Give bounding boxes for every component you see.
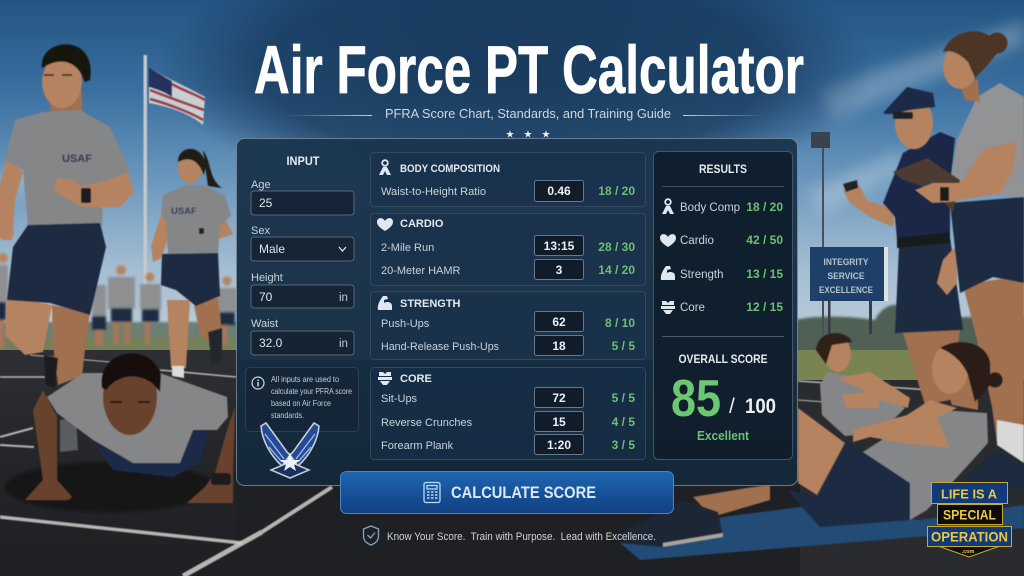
panel: results	[654, 152, 792, 460]
row: 20-meter hamr: 20-Meter HAMR	[381, 265, 461, 277]
runner: woman in USAF shirt	[151, 149, 233, 378]
height field: Height	[251, 272, 283, 284]
section: body composition	[370, 152, 646, 206]
runner: man in USAF shirt: USAF	[62, 153, 92, 165]
result: cardio: 42 / 50	[746, 233, 783, 247]
waist field: 32.0	[259, 336, 283, 350]
section heading: STRENGTH	[400, 298, 461, 310]
row: reverse crunches: Reverse Crunches	[381, 417, 473, 429]
row: push-ups: 62	[552, 315, 566, 329]
row: forearm plank: 3 / 5	[612, 438, 635, 452]
result: body comp: Body Comp	[680, 202, 740, 214]
height field: 70	[259, 290, 273, 304]
tagline: Know Your Score. Train with Purpose. Lead with Excellence.	[387, 531, 656, 543]
title backdrop vignette	[155, 0, 875, 200]
info note: calculate your PFRA score	[271, 386, 352, 396]
row: 2-mile run: 28 / 30	[598, 240, 635, 254]
button label: CALCULATE SCORE	[451, 483, 596, 502]
result: cardio: Cardio	[680, 235, 714, 247]
row: sit-ups: Sit-Ups	[381, 393, 418, 405]
waist field	[251, 318, 354, 355]
logo: life is a special operation: LIFE IS A	[941, 486, 998, 502]
section heading: CARDIO	[400, 218, 444, 230]
section heading: CORE	[400, 373, 432, 385]
section: cardio	[370, 214, 646, 286]
row: sit-ups: 72	[552, 391, 566, 405]
sign: integrity service excellence: SERVICE	[828, 271, 864, 282]
result: strength: Strength	[680, 269, 723, 281]
icon: person	[379, 160, 391, 175]
result: cardio	[660, 233, 783, 247]
situp partner man	[816, 333, 910, 436]
row: 2-mile run	[381, 236, 635, 256]
age field: 25	[259, 196, 273, 210]
runner: woman in USAF shirt: USAF	[171, 206, 197, 217]
sex field: Male	[259, 242, 285, 256]
result: core: Core	[680, 302, 705, 314]
overall score: 100	[745, 395, 776, 418]
section: strength	[370, 292, 646, 360]
pushup athlete	[5, 353, 235, 512]
overall score: Excellent	[697, 429, 750, 443]
row: waist-to-height: Waist-to-Height Ratio	[381, 186, 486, 198]
stars: ★	[542, 130, 551, 140]
exercise mat	[620, 505, 1024, 560]
row: 2-mile run: 2-Mile Run	[381, 242, 434, 254]
age field	[251, 179, 354, 215]
flag and flagpole	[144, 55, 205, 287]
row: 20-meter hamr	[381, 260, 635, 280]
section heading: BODY COMPOSITION	[400, 163, 500, 175]
results heading: RESULTS	[699, 162, 747, 176]
row: hand-release push-ups	[381, 336, 635, 356]
waist field: Waist	[251, 318, 278, 330]
row: reverse crunches: 15	[552, 415, 566, 429]
result: core: 12 / 15	[746, 300, 783, 314]
section: core	[370, 368, 646, 460]
waist field: in	[339, 338, 348, 350]
result: strength: 13 / 15	[746, 267, 783, 281]
row: push-ups: Push-Ups	[381, 318, 430, 330]
overall score: OVERALL SCORE	[678, 352, 768, 366]
logo: life is a special operation: SPECIAL	[943, 508, 996, 522]
stars	[506, 130, 551, 140]
row: hand-release push-ups: 5 / 5	[612, 339, 635, 353]
row: 20-meter hamr: 3	[556, 263, 563, 277]
situp woman	[620, 342, 1002, 547]
overall score: 85	[671, 370, 721, 428]
row: waist-to-height: 18 / 20	[598, 184, 635, 198]
overall score	[671, 352, 776, 443]
row: push-ups	[381, 312, 635, 332]
sign: integrity service excellence: EXCELLENCE	[819, 285, 873, 296]
icon: calculator	[424, 482, 440, 502]
sex field: Sex	[251, 225, 270, 237]
light pole	[811, 132, 830, 335]
age field: Age	[251, 179, 271, 191]
button: calculate score	[340, 472, 674, 514]
row: forearm plank	[381, 434, 635, 454]
info note: standards.	[271, 410, 304, 420]
stars: ★	[506, 130, 515, 140]
main calculator panel	[236, 138, 798, 486]
row: hand-release push-ups: 18	[552, 339, 566, 353]
logo: life is a special operation	[928, 482, 1012, 557]
sex field	[251, 225, 354, 261]
row: forearm plank: Forearm Plank	[381, 440, 454, 452]
icon: heart	[377, 218, 393, 231]
result: core	[661, 300, 783, 314]
title: Air Force PT Calculator	[254, 32, 804, 108]
result: strength	[661, 266, 783, 281]
height field	[251, 272, 354, 308]
sign: integrity service excellence	[810, 247, 888, 334]
row: waist-to-height	[381, 180, 635, 202]
result: body comp: 18 / 20	[746, 200, 783, 214]
row: hand-release push-ups: Hand-Release Push-Ups	[381, 341, 499, 353]
row: reverse crunches	[381, 412, 635, 432]
row: 2-mile run: 13:15	[544, 239, 575, 253]
height field: in	[339, 292, 348, 304]
icon: bicep	[378, 296, 392, 310]
overall score: /	[729, 395, 735, 418]
row: forearm plank: 1:20	[547, 438, 571, 452]
icon: air force wings emblem	[261, 423, 319, 478]
icon: core	[378, 372, 392, 385]
row: waist-to-height: 0.46	[547, 184, 571, 198]
background runners	[0, 253, 237, 348]
tagline	[364, 526, 656, 545]
logo: life is a special operation: OPERATION	[931, 530, 1008, 544]
input column	[246, 154, 358, 478]
sign: integrity service excellence: INTEGRITY	[824, 257, 869, 268]
info note: All inputs are used to	[271, 374, 339, 384]
row: reverse crunches: 4 / 5	[612, 415, 635, 429]
input heading: INPUT	[286, 154, 320, 168]
info note	[246, 368, 358, 432]
info note: based on Air Force	[271, 398, 331, 408]
icon: shield check	[364, 526, 378, 545]
stars: ★	[524, 130, 533, 140]
logo: life is a special operation: .com	[962, 549, 975, 555]
row: 20-meter hamr: 14 / 20	[598, 263, 635, 277]
runner: man in USAF shirt	[0, 44, 134, 388]
coach woman in gray shirt	[893, 31, 1024, 488]
result: body comp	[662, 199, 783, 214]
subtitle with side rules: PFRA Score Chart, Standards, and Training Guide	[385, 107, 671, 121]
row: push-ups: 8 / 10	[605, 316, 635, 330]
row: sit-ups	[381, 388, 635, 408]
coach with cap, stopwatch and clipboard	[843, 87, 963, 405]
row: sit-ups: 5 / 5	[612, 391, 635, 405]
